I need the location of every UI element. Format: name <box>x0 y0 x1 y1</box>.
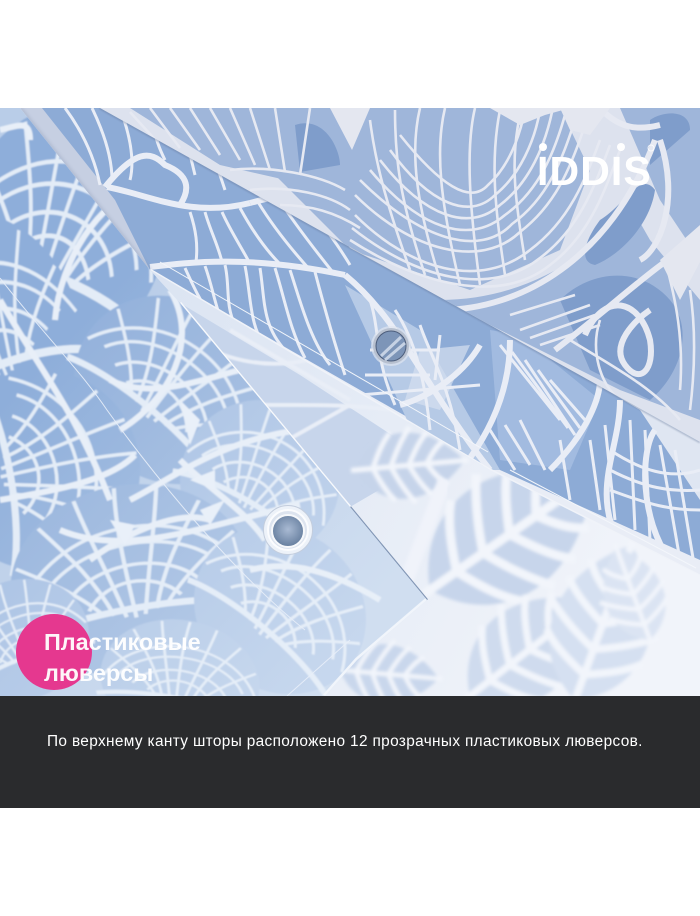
fabric layer: lower pale panel <box>150 270 700 741</box>
logo: IDDIS: IDDIS <box>537 148 652 194</box>
badge label: Пластиковые люверсы: люверсы <box>44 660 153 686</box>
badge label: Пластиковые люверсы: Пластиковые <box>44 629 201 655</box>
caption text: По верхнему канту шторы расположено 12 прозрачных пластиковых люверсов. <box>47 733 643 750</box>
pink circle badge <box>16 614 92 690</box>
photo: curtain fabric with leaf print and eyelets <box>0 108 700 696</box>
fabric layer: middle flap <box>0 108 700 588</box>
eyelet: upper <box>371 326 411 366</box>
fabric layer: left flap <box>0 108 427 696</box>
eyelet: lower <box>264 506 312 554</box>
dark caption band <box>0 696 700 808</box>
fabric layer: top fold <box>100 108 700 448</box>
